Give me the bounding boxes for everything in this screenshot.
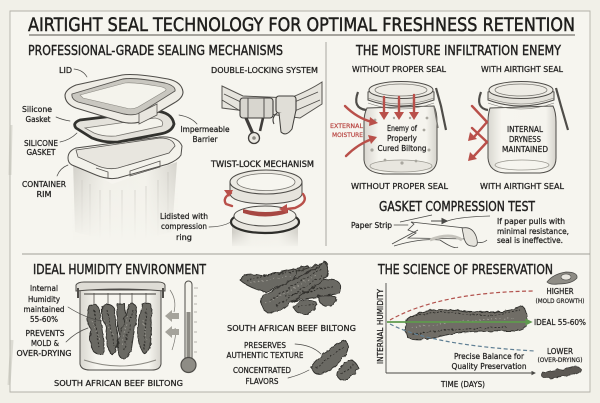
panel: ideal humidity <box>16 263 206 388</box>
label: silicone gasket <box>22 104 70 124</box>
icon: moldy biltong <box>547 272 577 284</box>
illustration: biltong strip <box>405 306 527 339</box>
label: higher <box>536 286 584 305</box>
label: container rim: CONTAINER <box>22 179 66 189</box>
panel: biltong <box>226 262 358 386</box>
label: concentrated flavors <box>233 365 309 386</box>
illustration: biltong pieces <box>311 341 358 380</box>
label: lower: LOWER <box>547 346 573 356</box>
label: lower: (OVER-DRYING) <box>538 357 582 364</box>
label: internal humidity: Internal <box>30 283 58 293</box>
icon: deflected arrows <box>468 106 487 161</box>
label: silicone gasket: Silicone <box>22 104 52 114</box>
illustration: hanging biltong jar <box>76 282 165 370</box>
label: higher: (MOLD GROWTH) <box>536 298 584 305</box>
label: preserves texture <box>226 340 321 360</box>
label: internal dryness <box>502 124 548 154</box>
label: silicone gasket caps: SILICONE <box>24 138 58 148</box>
label: external moisture: MOISTURE <box>332 132 363 139</box>
label: internal dryness: INTERNAL <box>507 124 543 134</box>
label: internal humidity <box>24 283 102 324</box>
illustration: sealed jar <box>479 82 568 173</box>
label: lid: LID <box>59 65 72 75</box>
illustration: twist-lock jar <box>230 170 302 248</box>
panel: sealing mechanisms <box>22 44 322 248</box>
label: airtight top: WITH AIRTIGHT SEAL <box>481 64 563 74</box>
label: precise balance: Quality Preservation <box>452 361 526 371</box>
label: enemy text <box>378 123 426 153</box>
chart: humidity over time <box>386 283 535 373</box>
axes <box>386 283 535 373</box>
illustration: paper strip and hand <box>392 215 490 248</box>
label: impermeable barrier: Impermeable <box>180 124 230 134</box>
heading: moisture infiltration: THE MOISTURE INFILTRATION ENEMY <box>355 44 561 59</box>
label: x axis: TIME (DAYS) <box>440 379 485 389</box>
label: preserves texture: PRESERVES <box>244 340 286 350</box>
label: concentrated flavors: FLAVORS <box>246 376 278 386</box>
label: lid <box>59 65 87 77</box>
label: silicone gasket: Gasket <box>26 114 51 124</box>
label: twist-lock mechanism: TWIST-LOCK MECHANISM <box>210 160 314 170</box>
label: internal humidity: 55-60% <box>30 314 58 324</box>
label: impermeable barrier <box>179 115 230 144</box>
label: impermeable barrier: Barrier <box>192 134 218 144</box>
label: silicone gasket caps: GASKET <box>26 147 56 157</box>
icon: moisture arrows <box>345 95 419 156</box>
label: higher: HIGHER <box>546 286 574 296</box>
label: prevents mold: OVER-DRYING <box>16 348 72 358</box>
label: external moisture <box>330 123 364 139</box>
text: test result: If paper pulls with <box>497 216 565 226</box>
label: internal dryness: DRYNESS <box>509 134 541 144</box>
label: compression ring: ring <box>176 232 192 242</box>
label: airtight bottom: WITH AIRTIGHT SEAL <box>480 181 564 191</box>
text: test result: seal is ineffective. <box>497 235 563 245</box>
label: compression ring: compression <box>161 221 207 231</box>
label: container rim: RIM <box>36 189 52 199</box>
line: ideal <box>387 321 529 323</box>
line: higher <box>390 291 535 320</box>
label: compression ring <box>160 211 231 242</box>
panel: moisture enemy <box>330 44 569 248</box>
label: enemy text: Cured Biltong <box>378 143 426 153</box>
label: beef biltong centre: SOUTH AFRICAN BEEF BILTONG <box>227 323 356 333</box>
heading: gasket test: GASKET COMPRESSION TEST <box>379 200 535 215</box>
label: precise balance: Precise Balance for <box>454 351 525 361</box>
text: test result: minimal resistance, <box>497 226 569 236</box>
label: ideal: IDEAL 55-60% <box>534 317 586 327</box>
illustration: unsealed jar <box>356 82 446 174</box>
line: lower <box>390 324 535 351</box>
label: internal humidity: maintained <box>24 304 64 314</box>
label: concentrated flavors: CONCENTRATED <box>233 365 291 375</box>
label: prevents mold: PREVENTS <box>26 328 64 338</box>
label: prevents mold <box>16 328 88 358</box>
label: enemy text: Properly <box>387 133 417 143</box>
text: test result <box>497 216 569 245</box>
label: enemy text: Enemy of <box>387 123 418 133</box>
label: precise balance <box>452 351 526 371</box>
label: paper strip: Paper Strip <box>351 220 392 230</box>
illustration: exploded container <box>65 74 183 240</box>
heading: sealing mechanisms: PROFESSIONAL-GRADE SEALING MECHANISMS <box>28 44 283 59</box>
icon: thermometer <box>181 281 198 372</box>
label: y axis: INTERNAL HUMIDITY <box>375 288 385 364</box>
heading: ideal humidity: IDEAL HUMIDITY ENVIRONMENT <box>33 263 206 278</box>
label: beef biltong left: SOUTH AFRICAN BEEF BILTONG <box>54 378 183 388</box>
illustration: biltong pile <box>239 262 341 314</box>
label: external moisture: EXTERNAL <box>330 123 364 130</box>
heading: science: THE SCIENCE OF PRESERVATION <box>377 263 553 278</box>
icon: dried biltong <box>541 366 581 378</box>
label: double-locking system: DOUBLE-LOCKING SYSTEM <box>211 65 318 75</box>
label: internal dryness: MAINTAINED <box>502 144 548 154</box>
label: compression ring: Lidisted with <box>160 211 208 221</box>
illustration: double-locking clasp <box>222 82 322 144</box>
panel: science of preservation <box>375 263 586 389</box>
label: internal humidity: Humidity <box>28 294 60 304</box>
label: container rim <box>22 165 68 199</box>
label: preserves texture: AUTHENTIC TEXTURE <box>226 350 304 360</box>
icon: twist arrows <box>224 190 305 213</box>
label: silicone gasket caps <box>24 133 77 157</box>
label: without seal bottom: WITHOUT PROPER SEAL <box>351 181 448 191</box>
icon: humidity arrows <box>165 290 179 350</box>
label: prevents mold: MOLD & <box>31 338 60 348</box>
label: lower <box>538 346 582 364</box>
label: without seal top: WITHOUT PROPER SEAL <box>352 64 446 74</box>
